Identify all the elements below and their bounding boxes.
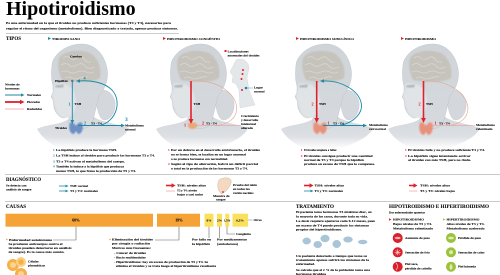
diagram: head, congenital: y desarrollo	[241, 118, 258, 122]
cause: thyroid removal: Eliminación del tiroides	[112, 238, 154, 242]
list: healthy thyroid steps: T3 y T4 activan el metabolismo del cuerpo.	[56, 160, 125, 164]
diagram: head, thyroid healthy: Cerebro	[70, 54, 82, 58]
diagnosis: healthy	[59, 184, 99, 193]
icon: pills	[303, 235, 367, 248]
treatment text: la mayoría de los casos, durante toda su vida.	[296, 214, 368, 218]
diagnosis: subclinical: T3 y T4: normales	[314, 189, 344, 193]
column: hypothyroidism: Bajos niveles de T3 y T4.	[393, 222, 432, 226]
diagnosis: hypothyroidism: T3 y T4: niveles bajos	[420, 189, 456, 193]
diagram: head, thyroid healthy: TSH	[74, 102, 82, 106]
icon: plasma cells	[7, 257, 46, 275]
intro text: regular el ritmo del organismo (metabolismo). Bien diagnosticado y tratado, apenas produce síntomas.	[6, 26, 178, 30]
cause: pituitary failure: la hipófisis	[192, 242, 211, 246]
list: healthy thyroid steps: También la induce a la hipófisis que produzca	[56, 164, 124, 168]
diagnosis: congenital: TSH: niveles altos	[177, 184, 207, 188]
diagram: head, thyroid healthy: Hipófisis	[55, 79, 68, 83]
heading: hipotiroidismo e hipertiroidismo: HIPOTIROIDISMO E HIPERTIROIDISMO	[389, 205, 489, 210]
diagram: head, subclinical: Metabolismo	[369, 123, 388, 127]
list: congenital steps: 2	[168, 162, 170, 166]
legend: niveles de hormonas	[5, 82, 43, 111]
diagram: head, congenital: 1	[184, 122, 186, 128]
diagram: head, thyroid healthy	[37, 44, 144, 149]
legend: niveles de hormonas: Normales	[27, 93, 42, 97]
bar chart: causes: 19%	[175, 218, 183, 222]
diagram: head, hypothyroidism	[388, 44, 495, 149]
cause: medication	[217, 238, 248, 246]
diagram: head, hypothyroidism: Metabolismo	[476, 123, 495, 127]
treatment outcome text: tratamiento apenas sufrirá los síntomas de la	[296, 258, 369, 262]
list: subclinical steps: El tiroides consigue producir una cantidad	[304, 154, 373, 158]
treatment outcome text	[296, 254, 370, 275]
cause: autoimmune: de sangre). Es la causa más común.	[8, 250, 65, 254]
diagram: head, congenital: T3 · T4	[206, 122, 217, 126]
cause: autoimmune: Se producen anticuerpos contra el	[8, 242, 63, 246]
list: congenital steps: o no produce hormonas con normalidad.	[171, 157, 228, 161]
bar chart: causes: 2%	[217, 218, 223, 222]
treatment outcome text: Un paciente detectado a tiempo que toma su	[296, 254, 367, 258]
inset: abnormal thyroid locations: Localizaciones	[228, 50, 249, 54]
cause: medication: (amiodarona)	[217, 242, 238, 246]
list: healthy thyroid steps: 4	[53, 164, 55, 168]
list: healthy thyroid steps: La hipófisis produce la hormona TSH.	[56, 148, 117, 152]
column: hypothyroidism: Metabolismo ralentizado	[393, 226, 433, 230]
symptom: feeling cold	[393, 247, 430, 257]
cause: congenital: Congénito	[236, 232, 251, 236]
treatment text: El paciente toma hormonas T4 sintéticas diar., en	[296, 210, 372, 214]
list: congenital steps: Por un defecto en el desarrollo embrionario, el tiroides	[171, 148, 261, 152]
list: healthy thyroid steps: menos TSH, lo que frena la producción de T3 y T4.	[56, 169, 136, 173]
diagram: head, hypothyroidism: T3 · T4	[439, 122, 450, 126]
treatment text: propios del hipertiroidismo.	[296, 228, 342, 232]
list: congenital steps	[168, 148, 261, 170]
diagram: head, subclinical: TSH	[319, 102, 326, 106]
cause: autoimmune: Enfermedad autoinmune	[9, 238, 53, 242]
symptom: feeling hot	[446, 247, 485, 257]
list: healthy thyroid steps: 3	[53, 160, 55, 164]
treatment text: La dosis requiere ajustarse cada 6-12 meses, pues	[296, 219, 376, 223]
diagnosis intro: Se detecta con	[6, 184, 27, 188]
bar chart: causes: Otros	[254, 218, 262, 222]
column: hypothyroidism	[389, 218, 433, 230]
symptom: feeling hot: Sensación de calor	[458, 250, 485, 254]
diagram: head, thyroid healthy: 3	[125, 117, 128, 123]
inset: abnormal thyroid locations: Lugar	[254, 86, 264, 90]
icon: heel blood test: Prueba del talón	[233, 183, 257, 187]
list: healthy thyroid steps: 2	[53, 154, 55, 158]
diagnosis: subclinical: TSH: niveles altos	[314, 184, 345, 188]
list: subclinical steps: 2	[301, 154, 303, 158]
type header: subclínico	[296, 36, 354, 41]
diagram: head, hypothyroidism: ralentizado	[476, 127, 493, 131]
heading: tipos: TIPOS	[6, 37, 21, 42]
intro text: Es una enfermedad en la que el tiroides no produce suficientes hormonas (T4 y T3), necesarias para	[6, 21, 171, 25]
diagram: head, thyroid healthy: Tiroides	[55, 126, 68, 130]
list: congenital steps: 1	[168, 148, 170, 152]
diagnosis intro: análisis de sangre	[6, 188, 32, 192]
diagram: head, congenital: TSH	[194, 102, 201, 106]
list: healthy thyroid steps: 1	[53, 148, 55, 152]
list: congenital steps: Según el tipo de alteración, habrá un déficit parcial	[171, 162, 258, 166]
symptom: feeling cold: Sensación de frío	[405, 250, 430, 254]
diagnosis: congenital	[166, 183, 207, 196]
inset: abnormal thyroid locations: anormales del tiroides	[228, 54, 260, 58]
diagram: head, thyroid healthy: T3 · T4	[91, 122, 102, 126]
diagram: head, hypothyroidism: 1	[434, 120, 437, 126]
symptom: moist skin: Piel húmeda	[458, 265, 476, 269]
legend: niveles de hormonas: Reducidos	[27, 107, 43, 111]
cause: autoimmune	[6, 238, 72, 254]
diagram: head, subclinical: 1	[328, 120, 330, 126]
list: subclinical steps: normal de T3 y T4 porque la hipófisis	[304, 158, 365, 162]
treatment outcome text: enfermedad.	[296, 262, 315, 266]
connector lines	[53, 227, 235, 240]
heading: causas: CAUSAS	[6, 205, 26, 210]
diagram: head, congenital: 2	[202, 120, 204, 126]
symptom: weight gain: Aumento de peso	[405, 236, 430, 240]
diagram: head, thyroid healthy: normal	[125, 128, 136, 132]
column: hypothyroidism: HIPOTIROIDISMO	[393, 218, 424, 222]
list: hypothyroidism steps: 1	[405, 148, 407, 152]
treatment text: un exceso de T4 puede producir los síntomas	[296, 223, 370, 227]
diagram: head, hypothyroidism: 2	[418, 102, 421, 106]
diagnosis: congenital: T3 y T4: niveles	[177, 188, 198, 192]
cause: pituitary failure: Por fallo en	[192, 238, 211, 242]
diagram: head, thyroid healthy: Metabolismo	[125, 124, 144, 128]
legend: niveles de hormonas: Niveles de	[5, 82, 20, 86]
diagnosis: healthy: T3 y T4: normales	[70, 189, 99, 193]
icon: heel blood test: sangre	[216, 198, 226, 202]
diagram: head, congenital: alterado	[241, 126, 253, 130]
list: subclinical steps: 1	[301, 148, 303, 152]
type header: congénito: HIPOTIROIDISMO CONGÉNITO	[167, 36, 220, 41]
diagram: head, congenital	[156, 44, 259, 149]
type header: tiroides sano: TIROIDES SANO	[52, 37, 80, 41]
list: congenital steps: no se forma bien, se localiza en un lugar anormal	[171, 152, 246, 156]
icon: heel blood test: Muestra de	[213, 194, 230, 198]
symptom: dry skin, hair loss: Piel seca,	[405, 262, 418, 266]
column: hyperthyroidism: HIPERTIROIDISMO	[446, 218, 480, 222]
diagram: head, thyroid healthy: 2	[84, 120, 86, 126]
icon: heel blood test: recién nacidos	[233, 191, 254, 195]
icon: plasma cells: Células	[28, 260, 39, 264]
icon: plasma cells: plasmáticas	[28, 264, 46, 268]
list: healthy thyroid steps	[53, 148, 155, 173]
list: healthy thyroid steps: La TSH induce al tiroides para producir las hormonas T3 y T4.	[56, 154, 155, 158]
inset: abnormal thyroid locations	[224, 50, 265, 108]
list: subclinical steps	[301, 148, 375, 166]
bar chart: causes: 0,5%	[236, 218, 244, 222]
bar chart: causes: 60%	[72, 218, 80, 222]
diagnosis: subclinical	[304, 183, 345, 193]
bar chart: causes	[6, 214, 262, 227]
list: subclinical steps: produce en exceso de TSH que lo compensa.	[304, 162, 375, 166]
list: hypothyroidism steps: 2	[405, 154, 407, 158]
cause: thyroid removal: - Hipertiroidismo: hay un exceso de producción de T3 y T4. Se	[114, 260, 209, 264]
diagnosis: congenital: bajos o casi nulos	[177, 192, 204, 196]
cause: thyroid removal: elimina el tiroides y se trata luego el hipertiroidismo resultante	[116, 264, 217, 268]
heading: tratamiento: TRATAMIENTO	[296, 205, 334, 210]
symptom: moist skin	[446, 262, 476, 272]
diagram: head, thyroid healthy: 4	[84, 76, 86, 80]
diagnosis: healthy: TSH: normal	[70, 184, 88, 188]
column: hyperthyroidism	[443, 218, 485, 230]
symptom: dry skin, hair loss: pérdida de cabello	[405, 266, 432, 270]
type header: hipotiroidismo: HIPOTIROIDISMO	[405, 37, 436, 41]
list: hypothyroidism steps: La hipófisis sigue intentando activar	[408, 154, 471, 158]
column: hyperthyroidism: Altos niveles de T3 y T4.	[446, 222, 485, 226]
symptom: weight gain	[393, 233, 430, 243]
icon: heel blood test	[213, 178, 257, 202]
cause: pituitary failure	[192, 238, 211, 246]
list: hypothyroidism steps: El tiroides falla y no produce suficiente T3 y T4.	[408, 148, 485, 152]
cause: medication: Por medicamentos	[217, 238, 248, 242]
type header: subclínico: HIPOTIROIDISMO SUBCLÍNICO	[300, 36, 354, 41]
intro text	[6, 21, 178, 30]
diagnosis intro	[6, 184, 32, 192]
list: hypothyroidism steps: al tiroides con más TSH, pero no rinde.	[408, 158, 471, 162]
cause: thyroid removal: por cirugía o radiación	[112, 242, 150, 246]
legend: niveles de hormonas: hormonas	[5, 86, 20, 90]
subheading: Dos enfermedades opuestas	[389, 210, 426, 214]
column: hyperthyroidism: Metabolismo acelerado	[446, 226, 485, 230]
cause: autoimmune: tiroides pueden detectarse en análisis	[8, 246, 72, 250]
diagnosis: hypothyroidism	[409, 183, 456, 193]
diagram: head, congenital: intelectual	[241, 122, 256, 126]
diagram: head, subclinical: casi normal	[369, 127, 386, 131]
cause: thyroid removal: - Cáncer de tiroides	[114, 251, 147, 255]
diagram: head, congenital: Crecimiento	[241, 114, 259, 118]
bar chart: causes: 6%	[206, 218, 212, 222]
diagram: head, hypothyroidism: TSH	[426, 102, 433, 106]
treatment text	[296, 210, 376, 232]
symptom: dry skin, hair loss	[393, 262, 432, 272]
list: hypothyroidism steps	[405, 148, 485, 162]
list: congenital steps: o total en la producción de las hormonas T3 y T4.	[171, 166, 248, 170]
bar chart: causes: 1,5%	[224, 218, 231, 222]
icon: heel blood test: en todos los	[233, 187, 250, 191]
symptom: weight loss	[446, 233, 481, 243]
cause: thyroid removal: Motivos más frecuentes:	[112, 246, 151, 250]
diagram: head, subclinical: 2	[312, 102, 314, 106]
list: subclinical steps: El tiroides empieza a fallar.	[304, 148, 337, 152]
diagnosis: hypothyroidism: TSH: niveles altos	[420, 184, 451, 188]
cause: thyroid removal	[109, 238, 217, 268]
treatment outcome text: Se calcula que el 2 % de la población toma una	[296, 268, 370, 272]
diagram: head, thyroid healthy: 1	[68, 102, 71, 106]
cause: thyroid removal: - Bocio multinodular	[114, 256, 147, 260]
inset: abnormal thyroid locations: normal	[254, 90, 265, 94]
legend: niveles de hormonas: Elevados	[27, 100, 41, 104]
diagram: head, subclinical	[281, 44, 388, 149]
diagram: head, subclinical: T3 · T4	[333, 122, 344, 126]
symptom: weight loss: Pérdida de peso	[458, 236, 481, 240]
heading: diagnóstico: DIAGNÓSTICO	[6, 177, 41, 183]
